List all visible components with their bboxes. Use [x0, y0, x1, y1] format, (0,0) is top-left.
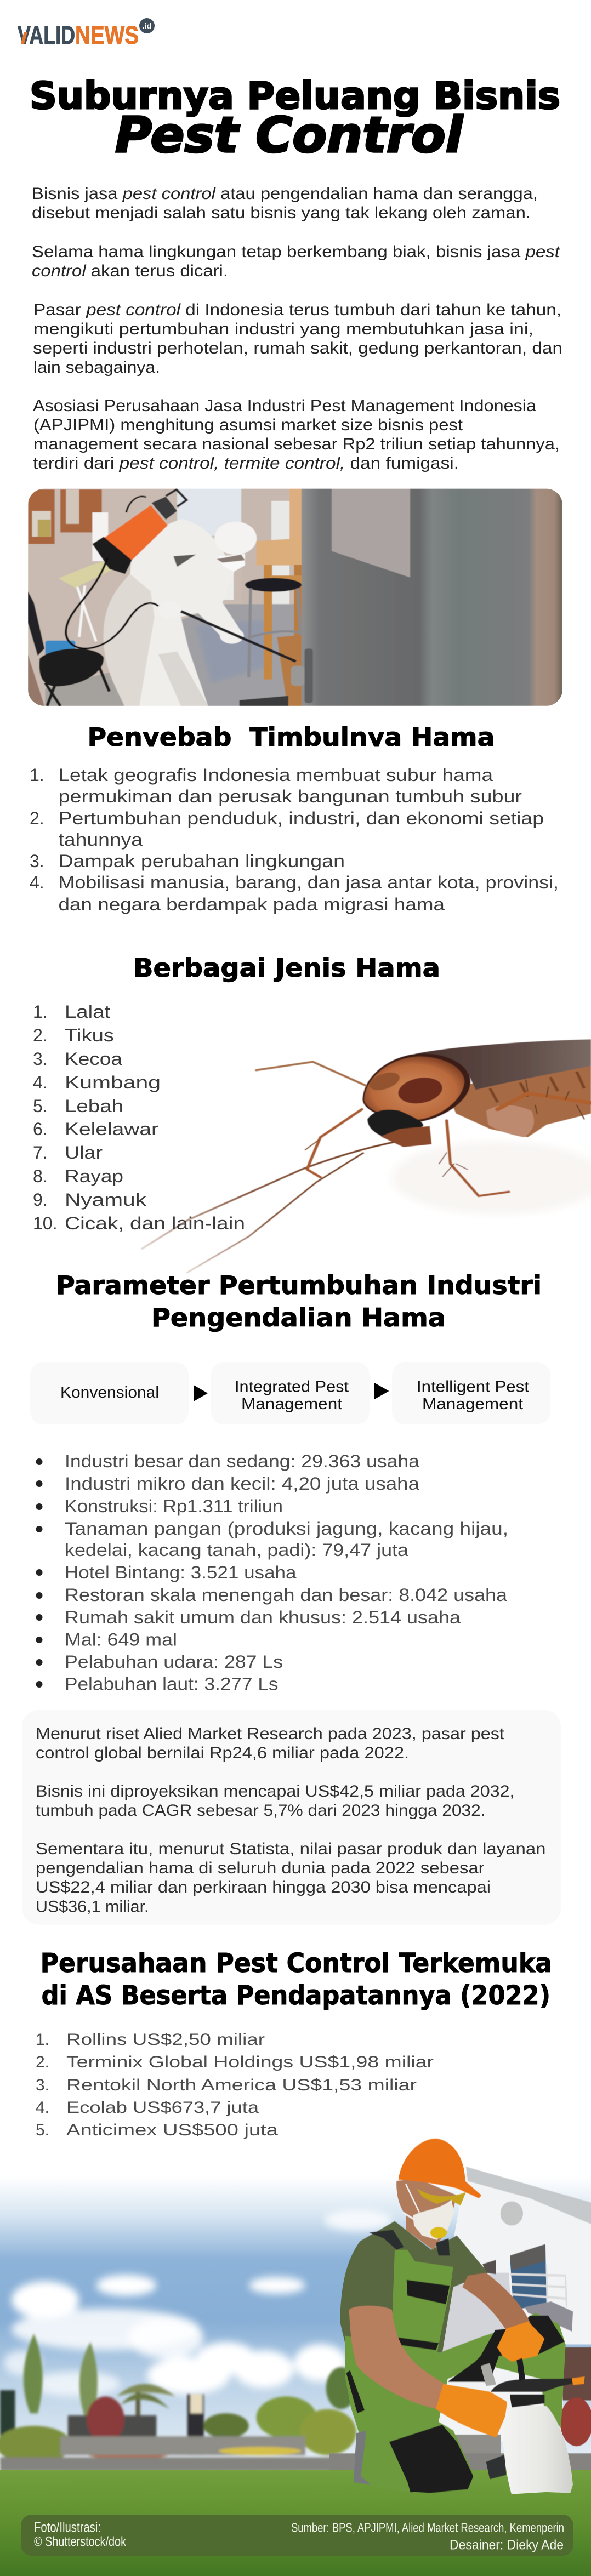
box: intelligent pest management	[392, 1362, 550, 1424]
numbered list: pest types: Lebah	[65, 1096, 123, 1116]
overalls upper	[391, 2250, 453, 2356]
panel: global market research: US$36,1 miliar.	[36, 1897, 149, 1916]
numbered list: top companies: 4.	[36, 2099, 49, 2117]
footer bar: credits: © Shutterstock/dok	[34, 2534, 126, 2550]
box: intelligent pest management: Intelligent Pest	[417, 1378, 529, 1395]
bullet list: industry parameters: Restoran skala menengah dan besar: 8.042 usaha	[65, 1585, 507, 1605]
bullet list: industry parameters: kedelai, kacang tanah, padi): 79,47 juta	[65, 1540, 408, 1560]
numbered list: top companies: Ecolab US$673,7 juta	[66, 2099, 259, 2117]
garden trees and shrubs	[0, 2333, 359, 2470]
intro text block: Bisnis jasa pest control atau pengendalian hama dan serangga,	[32, 185, 538, 203]
numbered list: pest types: 9.	[33, 1190, 48, 1210]
intro text block: terdiri dari pest control, termite control, dan fumigasi.	[33, 454, 459, 472]
numbered list: pest types: Nyamuk	[65, 1190, 147, 1210]
numbered list: causes: 4.	[30, 873, 44, 892]
intro text block	[32, 185, 562, 472]
box: konvensional	[30, 1362, 189, 1424]
spray bottle	[491, 2358, 585, 2495]
heading: penyebab timbulnya hama: Penyebab Timbulnya Hama	[88, 722, 495, 752]
numbered list: causes: 3.	[30, 851, 44, 871]
box: integrated pest management	[211, 1362, 370, 1424]
intro text block: mengikuti pertumbuhan industri yang membutuhkan jasa ini,	[33, 320, 533, 338]
numbered list: pest types	[33, 1002, 245, 1233]
numbered list: causes: tahunnya	[58, 830, 143, 850]
intro text block: Selama hama lingkungan tetap berkembang biak, bisnis jasa pest	[32, 243, 561, 261]
footer bar: credits	[21, 2515, 573, 2556]
numbered list: top companies: Rentokil North America US$1,53 miliar	[66, 2076, 417, 2094]
numbered list: pest types: 8.	[33, 1166, 48, 1186]
numbered list: pest types: 4.	[33, 1073, 48, 1092]
numbered list: top companies: 2.	[36, 2053, 49, 2071]
numbered list: pest types: 3.	[33, 1049, 48, 1069]
house	[329, 2167, 591, 2471]
numbered list: pest types: 1.	[33, 1002, 48, 1022]
numbered list: causes	[30, 765, 559, 914]
rear body and wing	[414, 1039, 591, 1137]
numbered list: pest types: Tikus	[65, 1025, 114, 1045]
numbered list: pest types: 6.	[33, 1119, 48, 1139]
bullet list: industry parameters	[36, 1451, 508, 1694]
numbered list: causes: Pertumbuhan penduduk, industri, dan ekonomi setiap	[58, 808, 544, 828]
numbered list: causes: Mobilisasi manusia, barang, dan jasa antar kota, provinsi,	[58, 873, 559, 892]
numbered list: pest types: Kecoa	[65, 1049, 122, 1069]
numbered list: pest types: 5.	[33, 1096, 48, 1116]
panel: global market research: pengendalian hama di seluruh dunia pada 2022 sebesar	[36, 1859, 485, 1877]
gloves	[436, 2384, 507, 2437]
heading: perusahaan pest control: Perusahaan Pest Control Terkemuka	[41, 1948, 552, 1979]
hat	[399, 2139, 481, 2198]
orange spray tank	[92, 489, 186, 574]
numbered list: causes: Letak geografis Indonesia membuat subur hama	[58, 765, 493, 785]
logo: Validnews.id: .id	[143, 21, 151, 30]
numbered list: top companies	[36, 2031, 434, 2139]
heading: perusahaan pest control: di AS Beserta Pendapatannya (2022)	[42, 1980, 550, 2011]
clouds	[4, 2210, 392, 2396]
legs	[257, 1062, 591, 1196]
numbered list: top companies: Terminix Global Holdings US$1,98 miliar	[66, 2053, 434, 2071]
photo: gardener with sprayer on lawn	[0, 2139, 591, 2576]
intro text block: disebut menjadi salah satu bisnis yang tak lekang oleh zaman.	[32, 204, 531, 222]
sky	[0, 2185, 591, 2464]
numbered list: pest types: Kumbang	[65, 1073, 161, 1092]
intro text block: Pasar pest control di Indonesia terus tumbuh dari tahun ke tahun,	[33, 301, 561, 319]
numbered list: top companies: Rollins US$2,50 miliar	[66, 2031, 265, 2049]
respirator mask	[413, 2199, 454, 2240]
intro text block: Asosiasi Perusahaan Jasa Industri Pest Management Indonesia	[33, 397, 536, 415]
numbered list: top companies: 3.	[36, 2076, 49, 2094]
numbered list: pest types: Cicak, dan lain-lain	[65, 1213, 245, 1233]
bullet list: industry parameters: Mal: 649 mal	[65, 1630, 177, 1650]
gardener figure	[340, 2139, 585, 2495]
numbered list: pest types: Ular	[65, 1143, 103, 1162]
lawn	[0, 2470, 591, 2495]
intro text block: management secara nasional sebesar Rp2 triliun setiap tahunnya,	[33, 435, 560, 453]
box: konvensional: Konvensional	[60, 1384, 159, 1401]
head shield	[362, 1053, 470, 1147]
numbered list: top companies: Anticimex US$500 juta	[66, 2121, 278, 2139]
panel: global market research	[22, 1710, 561, 1925]
bullet list: industry parameters: Rumah sakit umum dan khusus: 2.514 usaha	[65, 1608, 461, 1627]
intro text block: lain sebagainya.	[33, 358, 160, 377]
numbered list: causes: dan negara berdampak pada migrasi hama	[58, 894, 445, 914]
title	[30, 75, 560, 163]
photo: cockroach	[141, 1039, 591, 1273]
numbered list: causes: permukiman dan perusak bangunan tumbuh subur	[58, 787, 522, 806]
bullet list: industry parameters: Tanaman pangan (produksi jagung, kacang hijau,	[65, 1519, 508, 1538]
arm right	[462, 2273, 531, 2333]
heading: parameter pertumbuhan: Parameter Pertumbuhan Industri	[56, 1270, 542, 1300]
overalls leg	[345, 2313, 566, 2493]
heading: berbagai jenis hama: Berbagai Jenis Hama	[133, 953, 440, 983]
numbered list: pest types: Rayap	[65, 1166, 123, 1186]
logo: Validnews.id	[18, 18, 155, 49]
bullet list: industry parameters: Industri mikro dan kecil: 4,20 juta usaha	[65, 1474, 419, 1494]
title: Pest Control	[115, 106, 464, 163]
numbered list: top companies: 5.	[36, 2121, 49, 2139]
panel: global market research: Menurut riset Alied Market Research pada 2023, pasar pest	[36, 1725, 505, 1743]
panel: global market research: tumbuh pada CAGR sebesar 5,7% dari 2023 hingga 2032.	[36, 1802, 485, 1820]
arrow	[374, 1383, 389, 1399]
numbered list: causes: Dampak perubahan lingkungan	[58, 851, 345, 871]
bullet list: industry parameters: Hotel Bintang: 3.521 usaha	[65, 1563, 297, 1582]
numbered list: top companies: 1.	[36, 2031, 49, 2049]
numbered list: pest types: 10.	[33, 1213, 57, 1233]
logo: Validnews.id: NEWS	[75, 21, 139, 49]
logo: Validnews.id: VALID	[18, 21, 75, 49]
face	[396, 2178, 457, 2250]
numbered list: pest types: Lalat	[65, 1002, 110, 1022]
arrow	[194, 1385, 208, 1401]
panel: global market research: Sementara itu, menurut Statista, nilai pasar produk dan layanan	[36, 1840, 545, 1858]
photo: pest control worker spraying a room	[28, 489, 562, 706]
heading: parameter pertumbuhan: Pengendalian Hama	[151, 1303, 446, 1332]
heading: parameter pertumbuhan	[56, 1270, 542, 1332]
box: integrated pest management: Integrated Pest	[235, 1378, 349, 1395]
panel: global market research: Bisnis ini diproyeksikan mencapai US$42,5 miliar pada 2032,	[36, 1782, 514, 1800]
bullet list: industry parameters: Pelabuhan udara: 287 Ls	[65, 1652, 283, 1672]
panel: global market research: control global bernilai Rp24,6 miliar pada 2022.	[36, 1744, 409, 1762]
bullet list: industry parameters: Konstruksi: Rp1.311 triliun	[65, 1496, 283, 1516]
panel: global market research: US$22,4 miliar dan perkiraan hingga 2030 bisa mencapai	[36, 1878, 491, 1896]
numbered list: pest types: 7.	[33, 1143, 48, 1162]
bullet list: industry parameters: Pelabuhan laut: 3.277 Ls	[65, 1674, 279, 1694]
intro text block: (APJIPMI) menghitung asumsi market size bisnis pest	[33, 416, 463, 434]
flow: pest management evolution	[30, 1362, 550, 1424]
arm left	[349, 2306, 446, 2409]
footer bar: credits: Desainer: Dieky Ade	[450, 2538, 564, 2553]
foreground grass	[0, 2491, 591, 2576]
title: Suburnya Peluang Bisnis	[30, 75, 560, 118]
intro text block: seperti industri perhotelan, rumah sakit, gedung perkantoran, dan	[33, 339, 562, 357]
shirt	[340, 2221, 488, 2353]
numbered list: pest types: 2.	[33, 1025, 48, 1045]
intro text block: control akan terus dicari.	[32, 262, 228, 280]
box: integrated pest management: Management	[241, 1395, 342, 1413]
heading: perusahaan pest control	[41, 1948, 552, 2011]
numbered list: causes: 1.	[30, 765, 44, 785]
numbered list: pest types: Kelelawar	[65, 1119, 158, 1139]
numbered list: causes: 2.	[30, 808, 44, 828]
goggles	[417, 2188, 466, 2205]
bullet list: industry parameters: Industri besar dan sedang: 29.363 usaha	[65, 1451, 419, 1471]
worker in white protective suit	[104, 519, 257, 706]
footer bar: credits: Foto/Ilustrasi:	[34, 2520, 101, 2535]
box: intelligent pest management: Management	[422, 1395, 523, 1413]
